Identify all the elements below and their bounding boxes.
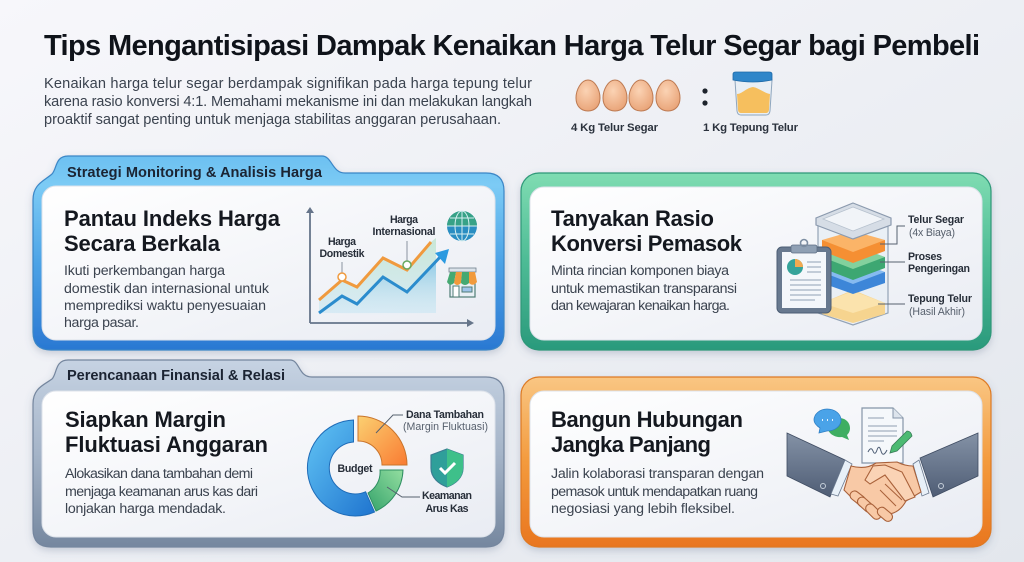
- body text: Alokasikan dana tambahan demi: [65, 466, 253, 482]
- body text: menjaga keamanan arus kas dari: [65, 484, 258, 500]
- heading: Jangka Panjang: [551, 432, 711, 457]
- body text: [65, 466, 258, 517]
- intro text: karena rasio konversi 4:1. Memahami mekanisme ini dan melakukan langkah: [44, 94, 532, 110]
- icon: contract document with pen: [862, 408, 912, 463]
- label: cash flow security: [422, 490, 472, 515]
- body text: Ikuti perkembangan harga: [64, 263, 225, 279]
- title: Tips Mengantisipasi Dampak Kenaikan Harga Telur Segar bagi Pembeli: [44, 30, 980, 62]
- stack labels: (Hasil Akhir): [909, 306, 965, 318]
- body text: dan kewajaran kenaikan harga.: [551, 298, 730, 314]
- heading: Siapkan Margin: [65, 407, 226, 432]
- icon: handshake: [787, 433, 978, 523]
- label: cash flow security: Arus Kas: [426, 503, 469, 515]
- stack labels: Pengeringan: [908, 263, 970, 275]
- stack leader lines: [878, 226, 905, 304]
- icon: clipboard report: [777, 240, 831, 313]
- intro text: proaktif sangat penting untuk menjaga stabilitas anggaran perusahaan.: [44, 112, 501, 128]
- body text: memprediksi waktu penyesuaian: [64, 298, 266, 314]
- panel frame: [521, 173, 991, 350]
- body text: [551, 466, 764, 517]
- body text: lonjakan harga mendadak.: [65, 501, 226, 517]
- panel frame: [521, 377, 991, 547]
- icon: shield: [431, 449, 463, 487]
- label: additional funds: (Margin Fluktuasi): [403, 421, 488, 433]
- body text: harga pasar.: [64, 315, 139, 331]
- panel: hubungan pemasok: [521, 377, 991, 547]
- line chart: domestic and international prices: Domestik: [320, 248, 365, 260]
- line chart: domestic and international prices: Harga: [328, 236, 356, 248]
- stack labels: [908, 214, 972, 318]
- panel frame with tab: [33, 156, 504, 350]
- heading: Fluktuasi Anggaran: [65, 432, 268, 457]
- intro text: [44, 76, 532, 128]
- tab label: Perencanaan Finansial & Relasi: [67, 368, 285, 384]
- body text: untuk memastikan transparansi: [551, 281, 737, 297]
- heading: [64, 206, 281, 256]
- body text: [64, 263, 270, 331]
- ratio graphic: 4 kg eggs to 1 kg powder: [571, 72, 799, 134]
- heading: Pantau Indeks Harga: [64, 206, 281, 231]
- heading: Bangun Hubungan: [551, 407, 743, 432]
- icon: globe: [447, 211, 477, 241]
- label: 4 kg eggs: 4 Kg Telur Segar: [571, 122, 659, 134]
- heading: [65, 407, 268, 457]
- stack labels: Tepung Telur: [908, 293, 972, 305]
- tab label: Strategi Monitoring & Analisis Harga: [67, 165, 323, 181]
- heading: Secara Berkala: [64, 231, 221, 256]
- card surface: [530, 187, 982, 340]
- body text: pemasok untuk mendapatkan ruang: [551, 484, 758, 500]
- label: cash flow security: Keamanan: [422, 490, 472, 502]
- line chart: domestic and international prices: Internasional: [372, 226, 436, 238]
- stack labels: (4x Biaya): [909, 227, 955, 239]
- heading: Konversi Pemasok: [551, 231, 743, 256]
- line chart: domestic and international prices: Harga: [390, 214, 418, 226]
- panel: margin anggaran: [33, 360, 504, 547]
- heading: [551, 407, 743, 457]
- body text: negosiasi yang lebih fleksibel.: [551, 501, 735, 517]
- icon: jar of egg powder: [733, 72, 772, 115]
- donut chart: budget: Budget: [338, 463, 373, 475]
- icon: chat bubbles: [814, 409, 850, 440]
- panel: rasio konversi: [521, 173, 991, 350]
- stack labels: Telur Segar: [908, 214, 964, 226]
- panel frame with tab: [33, 360, 504, 547]
- panel: monitoring harga: [33, 156, 504, 350]
- body text: domestik dan internasional untuk: [64, 281, 270, 297]
- heading: [551, 206, 743, 256]
- line chart: domestic and international prices: [306, 207, 474, 327]
- diagram: layered cost stack: [816, 203, 891, 325]
- card surface: [42, 186, 495, 340]
- card surface: [42, 391, 495, 537]
- heading: Tanyakan Rasio: [551, 206, 714, 231]
- icon: store: [447, 268, 477, 297]
- intro text: Kenaikan harga telur segar berdampak signifikan pada harga tepung telur: [44, 76, 532, 92]
- card surface: [530, 391, 982, 537]
- icon: four eggs: [576, 80, 680, 111]
- body text: [551, 263, 737, 314]
- stack labels: Proses: [908, 251, 942, 263]
- label: additional funds: [403, 409, 488, 433]
- ratio colon: [702, 88, 708, 106]
- body text: Jalin kolaborasi transparan dengan: [551, 466, 764, 482]
- donut chart: budget: [307, 416, 407, 516]
- donut leader lines: [376, 415, 420, 497]
- body text: Minta rincian komponen biaya: [551, 263, 729, 279]
- label: additional funds: Dana Tambahan: [406, 409, 484, 421]
- label: 1 kg powder: 1 Kg Tepung Telur: [703, 122, 799, 134]
